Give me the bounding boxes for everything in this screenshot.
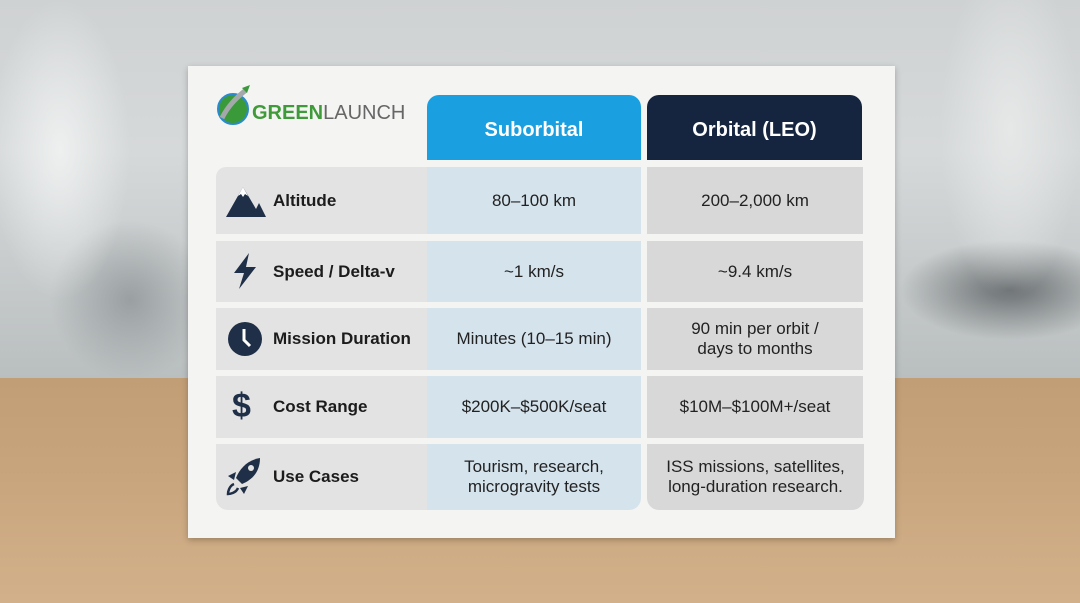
value: suborbital altitude xyxy=(427,167,641,234)
logo: GreenLaunch: GREENLAUNCH xyxy=(252,102,405,124)
value: orbital duration: 90 min per orbit / xyxy=(691,319,819,338)
header: Suborbital xyxy=(427,95,641,160)
label: Cost Range: $ xyxy=(232,387,251,425)
background: wooden table xyxy=(0,378,1080,603)
value: suborbital cost: $200K–$500K/seat xyxy=(462,397,606,416)
value: orbital altitude: 200–2,000 km xyxy=(701,190,809,210)
value: orbital duration xyxy=(647,308,863,370)
value: orbital speed: ~9.4 km/s xyxy=(718,262,792,280)
logo: GreenLaunch xyxy=(217,85,405,125)
header: Suborbital: Suborbital xyxy=(485,118,583,140)
label: Use Cases: Use Cases xyxy=(273,467,359,486)
value: suborbital use cases: Tourism, research, xyxy=(464,457,604,476)
label: Cost Range xyxy=(216,376,427,438)
value: suborbital cost xyxy=(427,376,641,438)
header: Orbital (LEO) xyxy=(647,95,862,160)
value: orbital cost: $10M–$100M+/seat xyxy=(680,397,830,416)
row: Mission Duration xyxy=(216,308,863,370)
row: Speed xyxy=(216,241,863,302)
header: Orbital (LEO): Orbital (LEO) xyxy=(692,118,817,140)
label: Cost Range: Cost Range xyxy=(273,397,367,416)
value: orbital speed xyxy=(647,241,863,302)
value: orbital cost xyxy=(647,376,863,438)
value: suborbital speed xyxy=(427,241,641,302)
card xyxy=(188,66,895,538)
label: Mission Duration xyxy=(216,308,427,370)
value: suborbital altitude: 80–100 km xyxy=(492,190,576,210)
value: suborbital use cases xyxy=(427,444,641,510)
label: Altitude xyxy=(216,167,427,234)
value: suborbital use cases: microgravity tests xyxy=(468,477,600,496)
value: orbital duration: days to months xyxy=(697,339,813,358)
value: orbital use cases: ISS missions, satellites, xyxy=(666,457,845,476)
value: suborbital duration: Minutes (10–15 min) xyxy=(457,329,611,348)
value: orbital altitude xyxy=(647,167,863,234)
row: Altitude xyxy=(216,167,863,234)
row: Use Cases xyxy=(216,444,864,510)
value: suborbital speed: ~1 km/s xyxy=(504,262,564,280)
label: Mission Duration: Mission Duration xyxy=(273,329,411,348)
label: Speed / Delta-v: Speed / Delta-v xyxy=(273,262,395,280)
label: Speed / Delta-v xyxy=(216,241,427,302)
value: orbital use cases xyxy=(647,444,864,510)
background: office blur xyxy=(0,0,1080,380)
value: suborbital duration xyxy=(427,308,641,370)
label: Altitude: Altitude xyxy=(273,190,336,210)
row: Cost Range xyxy=(216,376,863,438)
value: orbital use cases: long-duration research. xyxy=(668,477,843,496)
label: Use Cases xyxy=(216,444,427,510)
